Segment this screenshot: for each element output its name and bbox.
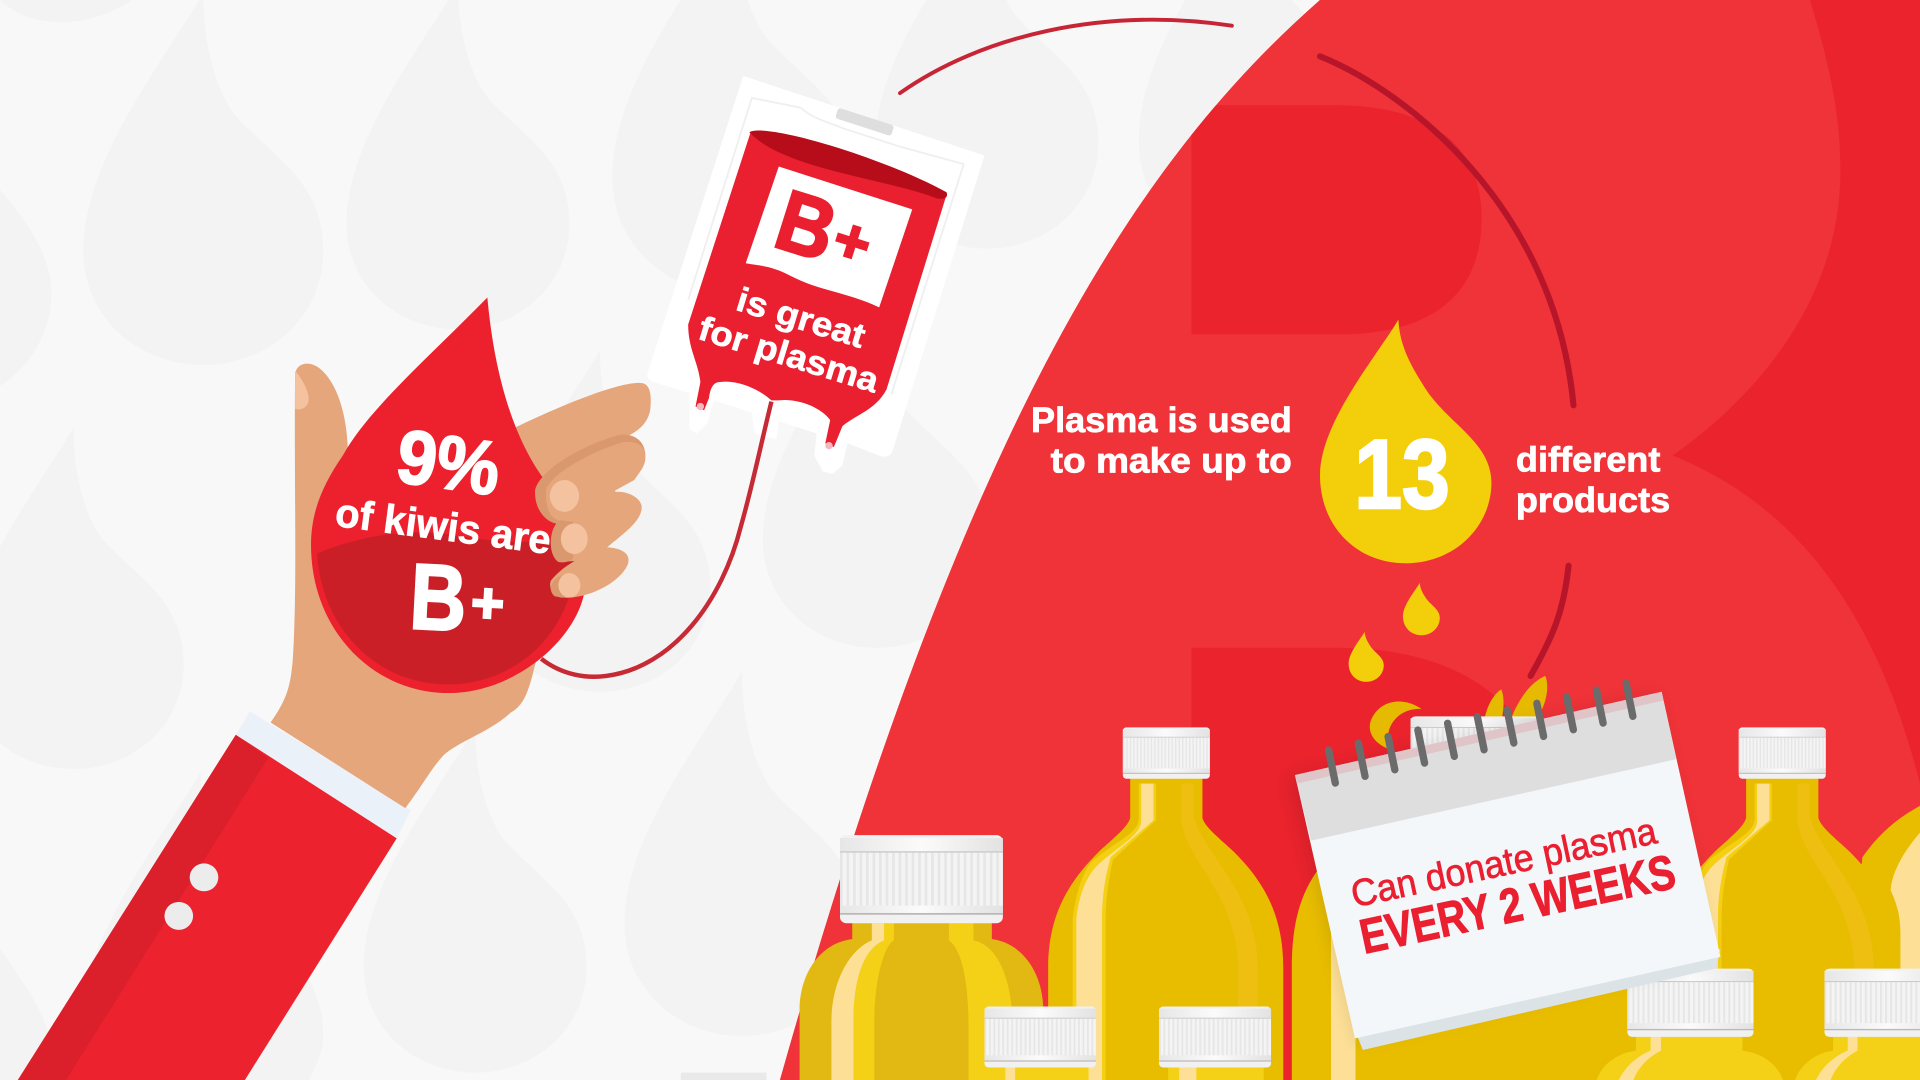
bottle: far right [1837,806,1920,1080]
small drop left [1349,632,1384,682]
text: different products: products [1516,480,1670,520]
text: Plasma is used to make up to: Plasma is used [1031,400,1292,440]
plasma splashes [1370,676,1547,749]
bag label [746,167,912,307]
B+: + [470,570,506,635]
arc: right [1320,56,1573,405]
arc: lower [1531,566,1569,676]
bottle: centre tall [1048,727,1283,1080]
bottle: front small a [984,1007,1096,1080]
for plasma: for plasma [694,310,884,401]
hanger slot [835,108,894,136]
port markers [697,403,833,449]
label text: B [765,172,848,280]
lower counter of B [1192,648,1513,1080]
label text: + [825,203,880,279]
bottle: front small d [1795,969,1920,1080]
page [1295,692,1720,1038]
text: Plasma is used to make up to: to make up to [1051,441,1292,481]
calendar shadow [1288,694,1714,1043]
bottle cap: bottom edge [681,1073,767,1080]
text: different products [1516,439,1670,520]
bottle: right tall [1664,727,1899,1080]
B+: B [408,544,469,651]
bag body [688,132,947,447]
9%: 9% [392,414,505,512]
sleeve [18,735,397,1080]
upper counter of B [1191,105,1482,334]
text: different products: different [1516,439,1661,479]
text: Plasma is used to make up to [1031,400,1292,481]
spiral rings [1329,683,1633,783]
blood drop [311,298,585,693]
sleeve inner edge [688,98,964,394]
panel: red plasma background [780,0,1920,1080]
hand [271,364,651,808]
background pattern: pale drops [0,0,1384,1080]
finger nails [550,480,588,598]
blood bag [647,76,984,474]
bottle: front small b [1159,1007,1271,1080]
EVERY 2 WEEKS: EVERY 2 WEEKS [1355,845,1680,965]
buttons [164,863,218,930]
cuff [236,711,411,838]
binding strip [1295,692,1663,784]
is great: is great [732,281,870,356]
calendar [1288,683,1720,1050]
bottle: behind calendar [1292,716,1659,1080]
header band [1295,692,1676,841]
of kiwis are: of kiwis are [333,489,554,563]
bottle: front small c [1597,969,1783,1080]
sleeve shadow [18,735,268,1080]
giant letter B [735,0,1920,1080]
bottle: front left [800,835,1043,1080]
fingers [535,435,645,598]
blood tube [541,402,771,677]
under page [1354,949,1720,1050]
yellow drop with number 13 [1320,320,1491,563]
bag sleeve [647,76,984,474]
yellow drop with number 13: 13 [1354,419,1450,529]
drop fill [317,532,576,684]
bag dark top [749,131,947,199]
small drop right [1403,583,1440,635]
thumb nail [295,371,309,409]
arc: top [900,20,1232,93]
arm [18,711,411,1080]
Can donate plasma: Can donate plasma [1347,810,1661,916]
